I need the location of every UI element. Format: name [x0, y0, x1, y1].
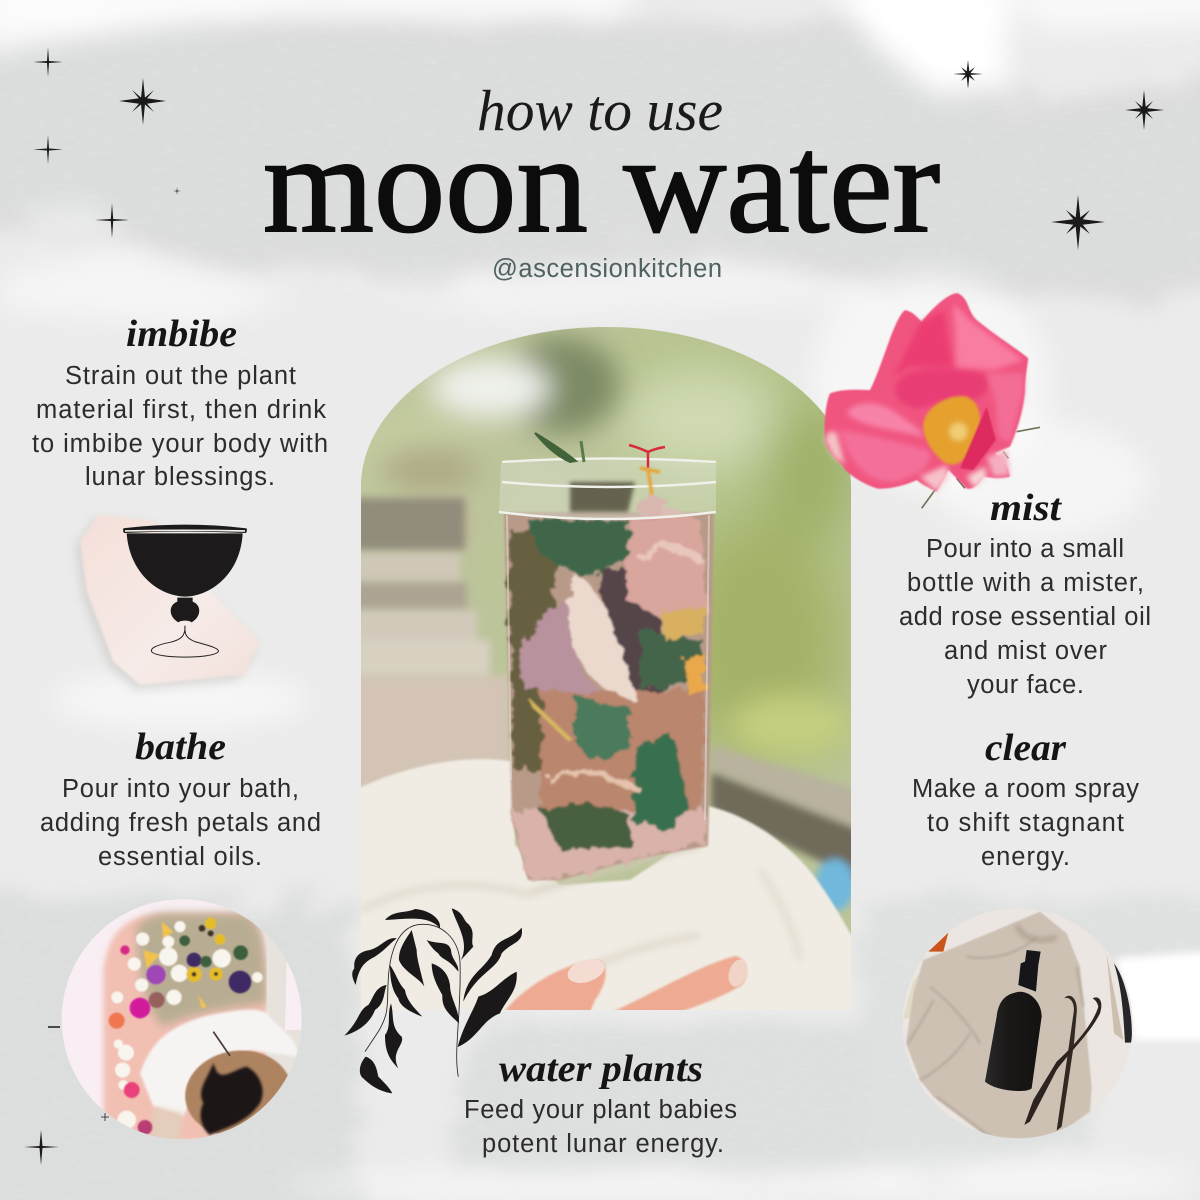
- text block: bathe: Pour into your bath,: [62, 775, 299, 803]
- text block: mist: Pour into a small: [926, 535, 1124, 563]
- text block: imbibe: Strain out the plant: [65, 362, 296, 390]
- text block: mist: add rose essential oil: [899, 603, 1151, 631]
- text block: clear: clear: [985, 727, 1067, 769]
- text block: water plants: water plants: [499, 1048, 703, 1090]
- text block: bathe: bathe: [135, 726, 226, 768]
- text block: bathe: essential oils.: [98, 843, 262, 871]
- jar with herbs: [499, 433, 716, 880]
- text block: clear: to shift stagnant: [927, 809, 1124, 837]
- text block: imbibe: [32, 313, 328, 491]
- hand: [504, 960, 606, 1012]
- text block: imbibe: lunar blessings.: [85, 463, 275, 491]
- text block: mist: bottle with a mister,: [907, 569, 1144, 597]
- text block: mist: and mist over: [944, 637, 1108, 665]
- main title: moon water: [263, 107, 940, 262]
- text block: water plants: Feed your plant babies: [464, 1096, 737, 1124]
- title: how to use: how to use: [477, 78, 723, 143]
- text block: clear: [912, 727, 1139, 871]
- text block: imbibe: to imbibe your body with: [32, 430, 328, 458]
- icon: rose flower: [825, 293, 1040, 508]
- text block: mist: mist: [990, 487, 1063, 529]
- text block: clear: Make a room spray: [912, 775, 1139, 803]
- text block: imbibe: material first, then drink: [36, 396, 326, 424]
- photo: spray bottle on linen: [900, 907, 1140, 1143]
- icon: black leafy branch: [344, 908, 522, 1093]
- text block: clear: energy.: [981, 843, 1070, 871]
- handle: @ascensionkitchen: [492, 255, 722, 283]
- text block: imbibe: imbibe: [126, 313, 237, 355]
- icon: rose quartz with black chalice: [76, 515, 260, 690]
- photo: moon water jar in arch: [355, 327, 860, 1015]
- text block: bathe: adding fresh petals and: [40, 809, 321, 837]
- text block: mist: [899, 487, 1151, 699]
- text block: water plants: [464, 1048, 737, 1158]
- text block: bathe: [40, 726, 321, 871]
- text block: mist: your face.: [967, 671, 1084, 699]
- towel: [355, 759, 860, 1015]
- text block: water plants: potent lunar energy.: [482, 1130, 724, 1158]
- photo: bath with flowers: [60, 897, 303, 1143]
